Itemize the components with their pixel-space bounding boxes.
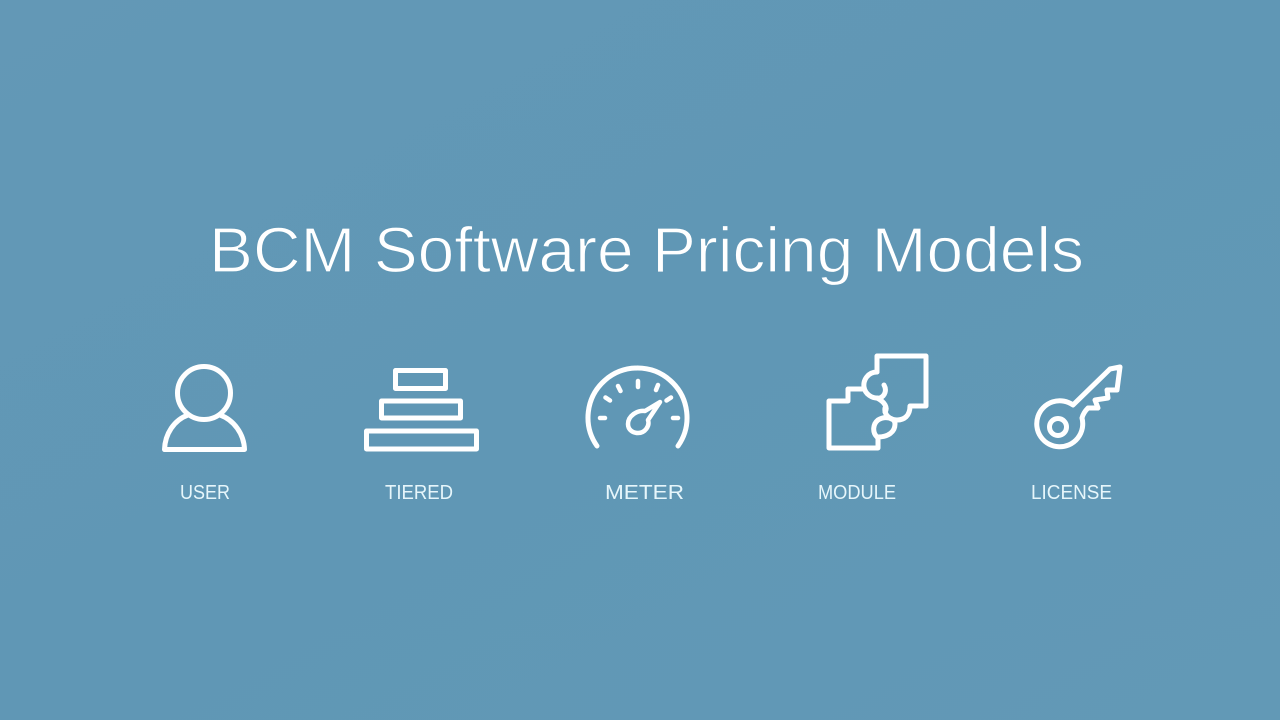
item: tiered bbox=[366, 370, 476, 504]
item: meter bbox=[588, 368, 687, 504]
label: license: LICENSE bbox=[1031, 482, 1112, 504]
label: tiered: TIERED bbox=[385, 482, 453, 504]
title: BCM Software Pricing Models bbox=[209, 214, 1084, 286]
icon: meter gauge bbox=[588, 368, 687, 446]
icon: key bbox=[1037, 367, 1120, 447]
item: license bbox=[1031, 367, 1120, 504]
label: module: MODULE bbox=[818, 482, 896, 504]
label: meter: METER bbox=[605, 482, 684, 504]
icon: user bbox=[164, 366, 244, 450]
label: user: USER bbox=[180, 482, 230, 504]
item: user bbox=[164, 366, 244, 504]
icon: puzzle pieces bbox=[829, 356, 926, 448]
item: module bbox=[818, 356, 926, 504]
icon: tiered stack bbox=[366, 370, 476, 449]
